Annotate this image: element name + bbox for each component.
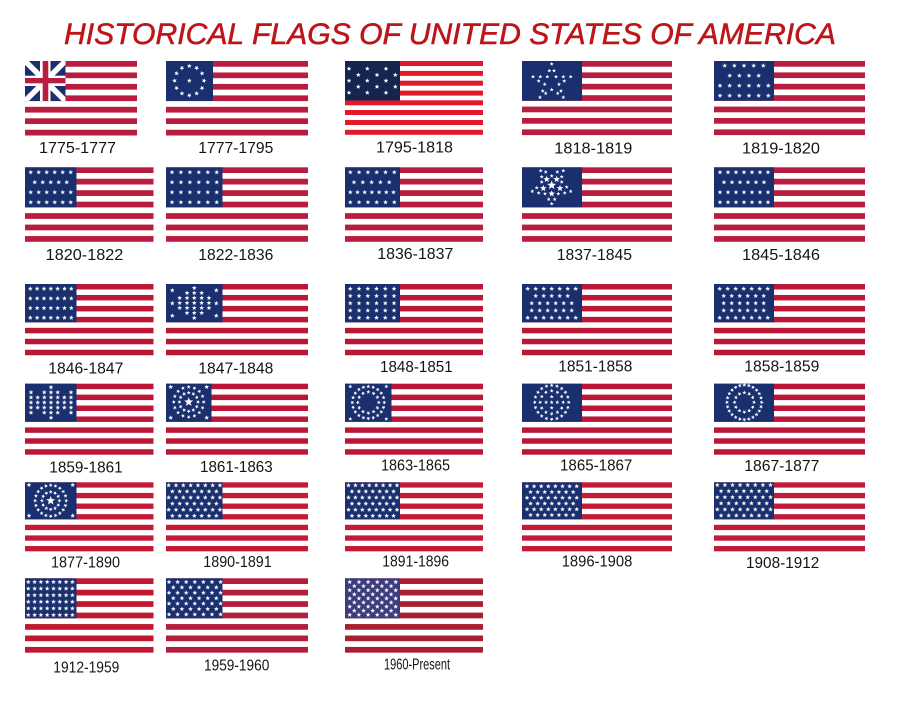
stars xyxy=(716,285,772,321)
stars xyxy=(346,285,398,321)
stars xyxy=(170,286,219,320)
flag: 1819-1820 xyxy=(714,61,865,158)
stars xyxy=(172,63,206,98)
stripes xyxy=(522,384,672,455)
flag: 1891-1896 xyxy=(345,479,483,570)
flag: 1960-Present xyxy=(345,578,483,674)
label: 1867-1877 xyxy=(744,458,819,475)
label: 1861-1863 xyxy=(200,459,273,476)
canton xyxy=(166,167,222,207)
stripes xyxy=(345,284,483,355)
label: 1846-1847 xyxy=(48,360,123,377)
stripes xyxy=(714,482,865,551)
flag: 1959-1960 xyxy=(165,577,308,675)
flag: 1877-1890 xyxy=(25,482,154,571)
canton xyxy=(522,61,582,101)
label: 1960-Present xyxy=(384,657,450,674)
stars xyxy=(27,167,75,207)
flag: 1777-1795 xyxy=(166,61,308,157)
label: 1859-1861 xyxy=(49,459,123,476)
canton xyxy=(166,284,222,322)
label: 1912-1959 xyxy=(53,659,119,676)
canton xyxy=(714,482,774,519)
stars xyxy=(25,579,76,618)
canton xyxy=(345,167,400,207)
canton xyxy=(345,61,400,100)
label: 1890-1891 xyxy=(203,554,272,571)
flag: 1837-1845 xyxy=(522,167,672,264)
stars xyxy=(165,479,224,522)
stars xyxy=(168,167,221,207)
stars xyxy=(27,284,75,323)
flag: 1890-1891 xyxy=(165,479,308,571)
stripes xyxy=(345,578,483,653)
stripes xyxy=(25,167,154,242)
stars xyxy=(523,481,580,521)
stars xyxy=(531,62,573,99)
stars xyxy=(348,384,388,421)
flag: 1861-1863 xyxy=(166,384,308,476)
flag: 1820-1822 xyxy=(25,167,154,264)
stars xyxy=(524,285,580,321)
stripes xyxy=(166,384,308,455)
flag: 1847-1848 xyxy=(166,284,308,377)
stars xyxy=(715,61,773,101)
stripes xyxy=(345,167,483,242)
stars xyxy=(345,479,400,522)
flag: 1859-1861 xyxy=(25,384,154,476)
stars xyxy=(530,169,573,205)
flag: 1848-1851 xyxy=(345,284,483,376)
label: 1858-1859 xyxy=(744,358,819,375)
canton xyxy=(25,482,76,519)
flag: 1896-1908 xyxy=(522,481,672,570)
stars xyxy=(725,383,764,422)
flag: 1846-1847 xyxy=(25,284,154,377)
flag: 1818-1819 xyxy=(522,61,672,158)
flag: 1851-1858 xyxy=(522,284,672,375)
stars xyxy=(346,167,399,207)
canton xyxy=(345,384,392,422)
label: 1822-1836 xyxy=(198,247,273,264)
canton xyxy=(25,284,76,322)
stripes xyxy=(522,284,672,355)
label: 1851-1858 xyxy=(558,358,632,375)
label: 1837-1845 xyxy=(557,247,632,264)
label: 1959-1960 xyxy=(204,658,269,675)
flag: 1845-1846 xyxy=(714,167,865,264)
stripes xyxy=(166,578,308,653)
label: 1820-1822 xyxy=(46,247,123,264)
stripes xyxy=(522,167,672,242)
stars xyxy=(345,578,400,619)
label: 1847-1848 xyxy=(198,360,273,377)
stars xyxy=(716,167,772,207)
label: 1836-1837 xyxy=(377,246,453,263)
label: 1795-1818 xyxy=(376,140,453,156)
canton xyxy=(345,284,400,322)
stars xyxy=(27,482,75,518)
stars xyxy=(165,577,225,620)
canton xyxy=(522,167,582,207)
flag: 1775-1777 xyxy=(25,61,137,157)
canton xyxy=(345,482,400,519)
label: 1891-1896 xyxy=(382,553,449,570)
label: 1865-1867 xyxy=(560,458,632,475)
canton xyxy=(714,167,774,207)
label: 1908-1912 xyxy=(746,555,819,572)
stripes xyxy=(714,384,865,455)
stripes xyxy=(345,61,483,135)
stars xyxy=(533,383,571,421)
stripes xyxy=(345,384,483,455)
label: 1877-1890 xyxy=(51,554,120,571)
label: 1848-1851 xyxy=(380,359,453,376)
stripes xyxy=(25,578,154,653)
canton xyxy=(166,61,213,101)
stripes xyxy=(714,284,865,355)
label: 1896-1908 xyxy=(562,553,632,570)
canton xyxy=(714,384,774,422)
flag: 1867-1877 xyxy=(714,383,865,475)
canton xyxy=(345,578,400,618)
stripes xyxy=(522,61,672,135)
flag: 1822-1836 xyxy=(166,167,308,264)
stars xyxy=(168,384,209,420)
stripes xyxy=(714,61,865,135)
flag: 1912-1959 xyxy=(25,578,154,676)
label: 1777-1795 xyxy=(198,140,273,157)
flag: 1836-1837 xyxy=(345,167,483,263)
canton xyxy=(714,284,774,322)
stars xyxy=(714,479,774,522)
canton xyxy=(522,482,582,519)
label: 1819-1820 xyxy=(742,141,820,158)
canton xyxy=(166,482,222,519)
stars xyxy=(28,385,74,420)
canton xyxy=(166,578,222,618)
stripes xyxy=(25,482,154,551)
flag: 1795-1818 xyxy=(345,61,483,156)
stripes xyxy=(166,167,308,242)
canton xyxy=(522,384,582,422)
label: 1818-1819 xyxy=(554,141,632,158)
canton xyxy=(166,384,212,422)
stripes xyxy=(25,284,154,355)
flag: 1863-1865 xyxy=(345,384,483,474)
stripes xyxy=(166,482,308,551)
stripes xyxy=(166,284,308,355)
stripes xyxy=(25,384,154,455)
title: HISTORICAL FLAGS OF UNITED STATES OF AMERICA xyxy=(64,18,836,51)
stripes xyxy=(166,61,308,135)
stripes xyxy=(345,482,483,551)
flag: 1865-1867 xyxy=(522,383,672,475)
canton xyxy=(522,284,582,322)
stripes xyxy=(25,61,137,135)
flag: 1908-1912 xyxy=(714,479,865,572)
label: 1863-1865 xyxy=(381,457,450,474)
canton xyxy=(25,167,76,207)
canton xyxy=(25,578,76,618)
stripes xyxy=(522,482,672,551)
canton xyxy=(714,61,774,101)
canton: union jack xyxy=(25,61,66,101)
stars xyxy=(347,66,398,95)
stripes xyxy=(714,167,865,242)
flag: 1858-1859 xyxy=(714,284,865,375)
canton xyxy=(25,384,76,422)
label: 1775-1777 xyxy=(39,140,116,157)
label: 1845-1846 xyxy=(742,247,820,264)
